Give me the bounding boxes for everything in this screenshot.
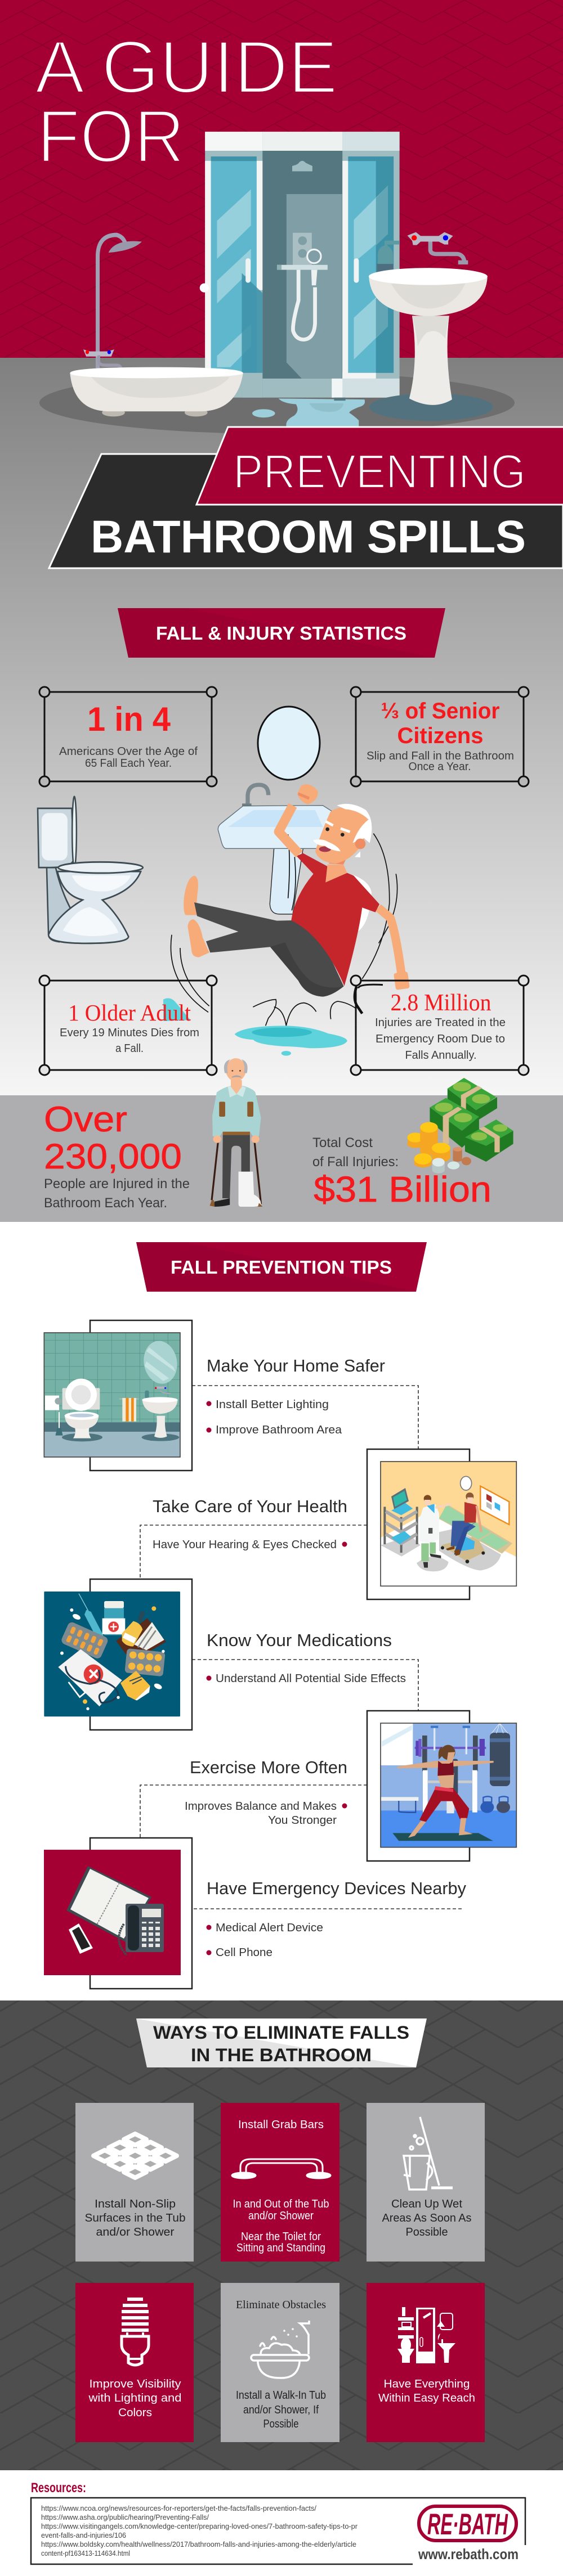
card: grab bars: Sitting and Standing [236, 2242, 325, 2254]
card: non-slip surfaces: Install Non-Slip [95, 2198, 176, 2210]
feet [184, 876, 209, 957]
illustration: man on crutches [209, 1058, 262, 1207]
page gradient floor [0, 358, 563, 1095]
big stat: total cost: of Fall Injuries: [312, 1154, 399, 1170]
card: improve visibility: with Lighting and [88, 2392, 181, 2404]
big stat: total cost: Total Cost [312, 1135, 373, 1150]
icon: light bulb [122, 2299, 149, 2365]
tip 1: make your home safer: Improve Bathroom Area [216, 1424, 342, 1436]
stack [465, 1120, 513, 1162]
card: clean up wet areas: Possible [405, 2226, 448, 2238]
card: eliminate obstacles: Possible [263, 2418, 298, 2430]
tip 1: make your home safer [44, 1320, 385, 1471]
illustration: falling man with sink and puddle [163, 784, 410, 1056]
big stat: over 230,000: 230,000 [44, 1137, 182, 1176]
tip 4: exercise more often: Exercise More Often [190, 1757, 347, 1777]
right arm [378, 907, 410, 990]
tip 1: make your home safer: Install Better Lighting [216, 1399, 329, 1411]
shirt [291, 853, 379, 986]
stat box: 1 in 4: Americans Over the Age of [59, 745, 198, 758]
tip 2: take care of your health [153, 1449, 516, 1599]
card: clean up wet areas: Clean Up Wet [391, 2198, 462, 2210]
title: A Guide For: FOR [37, 95, 185, 178]
card: everything within reach: Have Everything [384, 2378, 470, 2390]
bathroom illustration [44, 1333, 181, 1457]
legs [194, 902, 344, 997]
big stat: over 230,000: Bathroom Each Year. [44, 1195, 167, 1211]
section banner: Fall and Injury Statistics [118, 608, 445, 658]
title: A Guide For: A GUIDE [35, 26, 338, 109]
illustration: bathtub and shower pipe [70, 235, 243, 416]
stat box: 1 older adult: a Fall. [115, 1042, 144, 1055]
tip 5: have emergency devices nearby: Have Emergency Devices Nearby [207, 1878, 466, 1898]
tip 1: make your home safer: Make Your Home Safer [207, 1356, 385, 1375]
card: improve visibility: Colors [118, 2407, 152, 2419]
resources box [31, 2498, 525, 2564]
section banner: Fall and Injury Statistics: FALL & INJURY STATISTICS [156, 623, 406, 644]
section banner: Fall Prevention Tips: FALL PREVENTION TIPS [171, 1257, 392, 1278]
card: grab bars: Near the Toilet for [241, 2231, 321, 2243]
card: non-slip surfaces: Surfaces in the Tub [84, 2212, 186, 2224]
panel: ways to eliminate falls [0, 2000, 563, 2470]
banner: Bathroom Spills [49, 454, 563, 568]
logo: Re-Bath: RE·BATH [427, 2508, 508, 2541]
title: A Guide For [35, 26, 338, 178]
tip 5: have emergency devices nearby [44, 1838, 466, 1989]
card: non-slip surfaces: and/or Shower [96, 2226, 175, 2238]
tip 4: exercise more often: You Stronger [268, 1814, 337, 1827]
stat box: one third of senior citizens: ⅓ of Senior [381, 699, 500, 723]
stat box: 1 in 4: 65 Fall Each Year. [85, 757, 172, 770]
tip 4: exercise more often [185, 1711, 516, 1861]
icon: grab bar [232, 2159, 330, 2178]
sink [218, 785, 333, 914]
tip 3: know your medications: Understand All Potential Side Effects [216, 1673, 406, 1685]
logo: Re-Bath [418, 2506, 519, 2562]
coins [407, 1122, 471, 1174]
stat box: one third of senior citizens: Slip and Fall in the Bathroom [367, 750, 514, 762]
stat box: 2.8 million: Injuries are Treated in the [375, 1017, 506, 1029]
big stat: total cost [312, 1135, 491, 1210]
gym illustration [381, 1723, 516, 1847]
section banner: ways to eliminate falls [136, 2018, 427, 2067]
stack [430, 1098, 479, 1148]
stat box: 1 older adult: 1 Older Adult [68, 1000, 191, 1026]
stat box: 2.8 million [351, 975, 529, 1075]
icon: mirror [258, 707, 320, 780]
puddle [235, 1026, 347, 1056]
panel: injury and cost band [0, 1095, 563, 1222]
resources box: event-falls-and-injuries/106 [41, 2531, 126, 2539]
stat box: one third of senior citizens [351, 687, 529, 786]
connector dashes [140, 1386, 462, 1909]
big stat: total cost: $31 Billion [314, 1169, 491, 1210]
emergency devices illustration [44, 1850, 181, 1975]
card: eliminate obstacles: Eliminate Obstacles [236, 2299, 326, 2311]
clinic illustration [381, 1462, 516, 1586]
card: eliminate obstacles: and/or Shower, If [243, 2404, 319, 2416]
icon: walk-in tub [251, 2321, 309, 2378]
card: non-slip surfaces [75, 2103, 194, 2262]
card: grab bars: In and Out of the Tub [233, 2198, 329, 2210]
red wall [0, 0, 563, 358]
card: eliminate obstacles: Install a Walk-In Tub [236, 2389, 326, 2402]
illustration: shower cabin, sink [200, 132, 493, 427]
left arm [279, 784, 318, 854]
tip 3: know your medications: Know Your Medications [207, 1630, 392, 1650]
card: eliminate obstacles [221, 2283, 339, 2442]
section banner: ways to eliminate falls: WAYS TO ELIMINATE FALLS [153, 2022, 409, 2043]
big stat: over 230,000 [44, 1100, 190, 1211]
banner: Preventing: PREVENTING [233, 445, 526, 498]
stat box: 1 in 4: 1 in 4 [87, 700, 171, 738]
card: improve visibility [75, 2283, 194, 2442]
stat box: 2.8 million: 2.8 Million [391, 990, 491, 1016]
big stat: over 230,000: Over [44, 1100, 127, 1139]
big stat: over 230,000: People are Injured in the [44, 1176, 190, 1192]
stat box: 1 in 4 [39, 687, 217, 786]
icon: bathroom fixtures [397, 2307, 455, 2363]
logo: Re-Bath: www.rebath.com [418, 2546, 519, 2562]
tip 2: take care of your health: Have Your Hearing & Eyes Checked [153, 1539, 337, 1551]
stat box: one third of senior citizens: Citizens [397, 723, 483, 748]
icon: non-slip tiles [93, 2134, 177, 2178]
medications illustration [44, 1592, 180, 1716]
section banner: Fall Prevention Tips [136, 1242, 427, 1292]
card: improve visibility: Improve Visibility [89, 2378, 181, 2390]
icon: mop and bucket [404, 2117, 453, 2190]
stack [448, 1078, 497, 1121]
illustration: money and coins [407, 1078, 513, 1174]
stat box: one third of senior citizens: Once a Year. [409, 761, 471, 773]
icon: toilet [38, 797, 143, 943]
head [314, 804, 372, 882]
card: grab bars: and/or Shower [248, 2210, 314, 2222]
stat box: 1 older adult: Every 19 Minutes Dies from [60, 1027, 199, 1039]
tip 5: have emergency devices nearby: Medical Alert Device [216, 1922, 323, 1934]
illustration: water puddle [252, 398, 365, 427]
stat box: 2.8 million: Falls Annually. [405, 1049, 476, 1062]
card: clean up wet areas: Areas As Soon As [382, 2212, 472, 2224]
resources heading: Resources: [31, 2480, 86, 2496]
resources box: content-pf163413-114634.html [41, 2549, 130, 2557]
tip 3: know your medications [44, 1579, 406, 1730]
resources box: https://www.asha.org/public/hearing/Preventing-Falls/ [41, 2513, 209, 2521]
tip 4: exercise more often: Improves Balance and Makes [185, 1800, 337, 1813]
tip 5: have emergency devices nearby: Cell Phone [216, 1946, 272, 1959]
hero section [0, 0, 563, 1095]
card: everything within reach [367, 2283, 485, 2442]
section banner: ways to eliminate falls: IN THE BATHROOM [191, 2045, 372, 2065]
card: grab bars [221, 2103, 339, 2262]
tip 2: take care of your health: Take Care of Your Health [153, 1496, 347, 1516]
banner: Bathroom Spills: BATHROOM SPILLS [91, 511, 526, 563]
card: clean up wet areas [367, 2103, 485, 2262]
resources box: https://www.boldsky.com/health/wellness/2017/bathroom-falls-and-injuries-among-the-elderly/article [41, 2540, 356, 2548]
stat box: 1 older adult [39, 975, 217, 1075]
banner: Preventing [196, 427, 563, 505]
floor shadow [39, 372, 515, 434]
motion lines [171, 834, 397, 1026]
card: grab bars: Install Grab Bars [238, 2119, 324, 2131]
resources box: https://www.ncoa.org/news/resources-for-reporters/get-the-facts/falls-prevention-facts/ [41, 2504, 316, 2512]
stat box: 2.8 million: Emergency Room Due to [376, 1033, 505, 1045]
resources box: https://www.visitingangels.com/knowledge-center/preparing-loved-ones/7-bathroom-safety-tips-to-pr [41, 2522, 358, 2530]
card: everything within reach: Within Easy Reach [378, 2392, 475, 2404]
